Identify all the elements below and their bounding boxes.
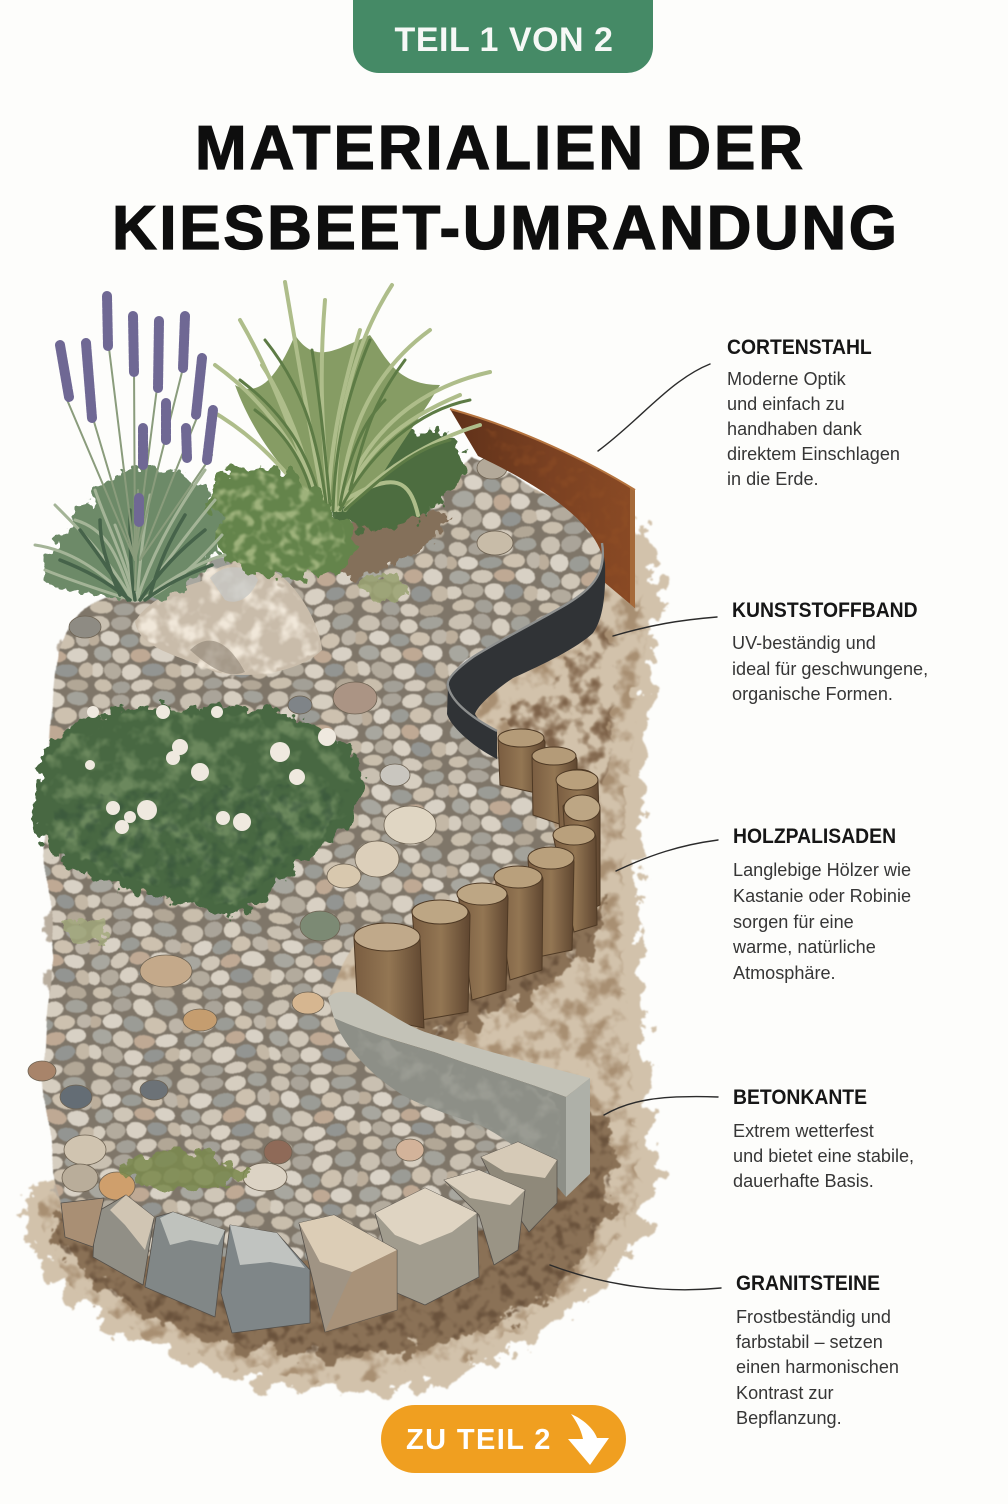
label: Cortenstahl: handhaben dank (727, 419, 862, 439)
label: Betonkante: Extrem wetterfest (733, 1121, 874, 1141)
flowering shrub (34, 705, 365, 915)
button: zu Teil 2 (381, 1405, 626, 1473)
label: Kunststoffband: organische Formen. (732, 684, 893, 704)
label: Holzpalisaden: HOLZPALISADEN (733, 824, 896, 848)
label: Granitsteine: GRANITSTEINE (736, 1271, 880, 1295)
label: Cortenstahl: CORTENSTAHL (727, 335, 872, 359)
part tab: TEIL 1 VON 2 (395, 21, 613, 59)
concrete edge (328, 992, 590, 1197)
boulder (135, 564, 322, 675)
label: Kunststoffband (732, 598, 928, 704)
lavender plant (35, 296, 225, 600)
title (112, 114, 897, 263)
label: Betonkante: dauerhafte Basis. (733, 1171, 874, 1191)
label: Holzpalisaden: sorgen für eine (733, 912, 854, 932)
label: Granitsteine: Bepflanzung. (736, 1408, 842, 1428)
label: Betonkante: BETONKANTE (733, 1085, 867, 1109)
ornamental grass (210, 282, 490, 515)
scattered pebbles (28, 457, 513, 1200)
part tab (353, 0, 653, 73)
gravel underlay (50, 640, 130, 1215)
lavender spikes (60, 296, 213, 522)
label: Kunststoffband: ideal für geschwungene, (732, 658, 928, 678)
button: zu Teil 2: ZU TEIL 2 (406, 1424, 552, 1456)
label: Holzpalisaden: Kastanie oder Robinie (733, 886, 911, 906)
leader lines (550, 364, 721, 1290)
label: Cortenstahl: und einfach zu (727, 394, 845, 414)
green shrub (208, 466, 353, 578)
label: Betonkante (733, 1085, 914, 1191)
label: Cortenstahl (727, 335, 900, 489)
soil background (24, 515, 661, 1393)
label: Cortenstahl: direktem Einschlagen (727, 444, 900, 464)
label: Holzpalisaden: Atmosphäre. (733, 963, 836, 983)
dark earth beneath plants (329, 511, 450, 580)
label: Cortenstahl: Moderne Optik (727, 369, 846, 389)
label: Betonkante: und bietet eine stabile, (733, 1146, 914, 1166)
wooden palisades (354, 729, 600, 1028)
label: Holzpalisaden (733, 824, 911, 983)
dark foliage behind grass (337, 429, 464, 530)
label: Holzpalisaden: warme, natürliche (733, 937, 876, 957)
label: Cortenstahl: in die Erde. (727, 469, 819, 489)
icon: curved down arrow (568, 1414, 609, 1465)
granite stones (61, 1142, 557, 1333)
title: MATERIALIEN DER (195, 114, 803, 183)
title: KIESBEET-UMRANDUNG (112, 194, 897, 263)
label: Kunststoffband: KUNSTSTOFFBAND (732, 598, 918, 622)
plastic band edge (447, 543, 605, 759)
corten steel edge (450, 409, 635, 608)
label: Granitsteine: einen harmonischen (736, 1357, 899, 1377)
label: Holzpalisaden: Langlebige Hölzer wie (733, 860, 911, 880)
label: Granitsteine: Kontrast zur (736, 1383, 834, 1403)
label: Granitsteine: farbstabil – setzen (736, 1332, 883, 1352)
label: Granitsteine: Frostbeständig und (736, 1307, 891, 1327)
label: Granitsteine (736, 1271, 899, 1428)
label: Kunststoffband: UV-beständig und (732, 633, 876, 653)
gravel bed (46, 458, 604, 1260)
moss tufts (65, 575, 408, 1196)
white blossoms (85, 705, 336, 834)
